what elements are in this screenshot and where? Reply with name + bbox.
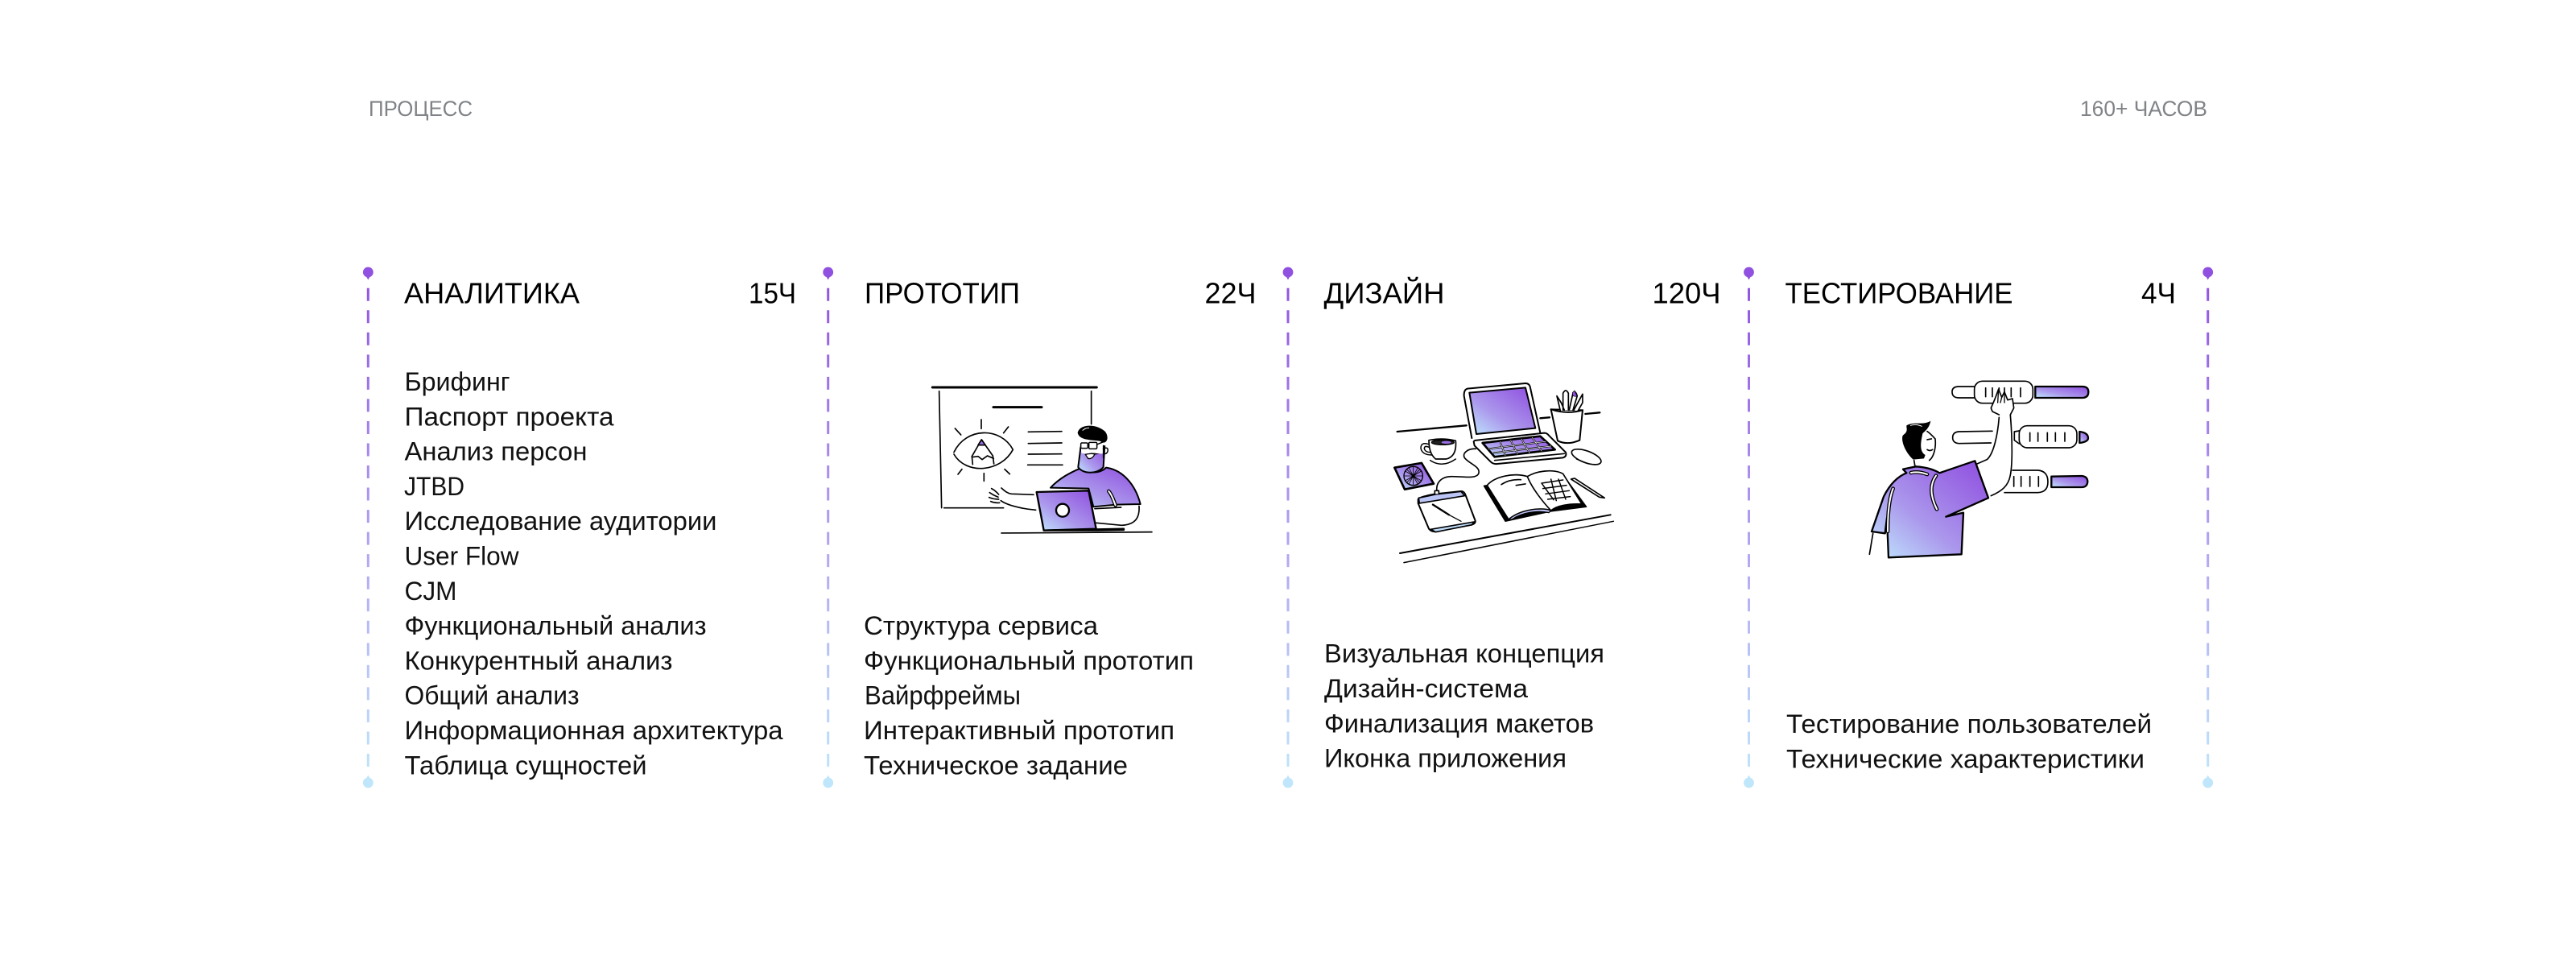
task list: analytics: Таблица сущностей <box>404 751 647 780</box>
task list: prototype: Вайрфреймы <box>865 681 1021 710</box>
label: total hours: 160+ ЧАСОВ <box>2080 97 2207 121</box>
timeline divider 1 <box>363 267 374 788</box>
timeline divider 5 <box>2202 267 2213 788</box>
task list: testing <box>1786 709 2152 773</box>
heading: design: ДИЗАЙН <box>1323 276 1444 310</box>
task list: testing: Тестирование пользователей <box>1786 709 2152 738</box>
hours: 15: 15Ч <box>749 277 796 310</box>
task list: analytics: Анализ персон <box>404 437 588 466</box>
panel: analytics <box>404 277 796 780</box>
hours: 4: 4Ч <box>2141 277 2176 310</box>
heading: analytics: АНАЛИТИКА <box>404 277 580 310</box>
hours: 22: 22Ч <box>1204 277 1256 310</box>
illustration: designer desk with laptop and notebook <box>1394 383 1613 563</box>
task list: analytics: Исследование аудитории <box>404 507 716 536</box>
task list: testing: Технические характеристики <box>1786 744 2145 773</box>
illustration: man presenting with laptop <box>932 387 1152 533</box>
task list: analytics: JTBD <box>404 472 464 501</box>
task list: prototype: Функциональный прототип <box>864 646 1194 675</box>
task list: prototype <box>864 611 1194 780</box>
task list: analytics: Информационная архитектура <box>404 716 783 745</box>
task list: design: Дизайн-система <box>1324 674 1528 703</box>
task list: analytics: Конкурентный анализ <box>404 646 673 675</box>
task list: analytics: User Flow <box>404 541 519 570</box>
task list: prototype: Интерактивный прототип <box>864 716 1174 745</box>
timeline divider 4 <box>1744 267 1754 788</box>
panel: testing <box>1785 277 2176 773</box>
heading: prototype: ПРОТОТИП <box>865 277 1020 310</box>
task list: prototype: Структура сервиса <box>864 611 1098 640</box>
task list: analytics: Брифинг <box>404 367 510 396</box>
task list: analytics: Общий анализ <box>404 681 580 710</box>
task list: analytics: Паспорт проекта <box>404 402 614 431</box>
task list: design: Иконка приложения <box>1324 744 1567 773</box>
panel: design <box>1323 276 1721 773</box>
hours: 120: 120Ч <box>1652 277 1721 310</box>
illustration: man adjusting sliders <box>1869 381 2088 557</box>
task list: design: Визуальная концепция <box>1324 639 1604 668</box>
panel: prototype <box>864 277 1256 780</box>
task list: prototype: Техническое задание <box>864 751 1128 780</box>
task list: analytics: Функциональный анализ <box>404 611 707 640</box>
task list: analytics: CJM <box>404 577 457 606</box>
task list: analytics <box>404 367 783 780</box>
timeline divider 3 <box>1283 267 1293 788</box>
task list: design: Финализация макетов <box>1324 709 1594 738</box>
timeline divider 2 <box>823 267 833 788</box>
label: process: ПРОЦЕСС <box>369 97 473 121</box>
task list: design <box>1324 639 1604 773</box>
heading: testing: ТЕСТИРОВАНИЕ <box>1785 277 2013 310</box>
